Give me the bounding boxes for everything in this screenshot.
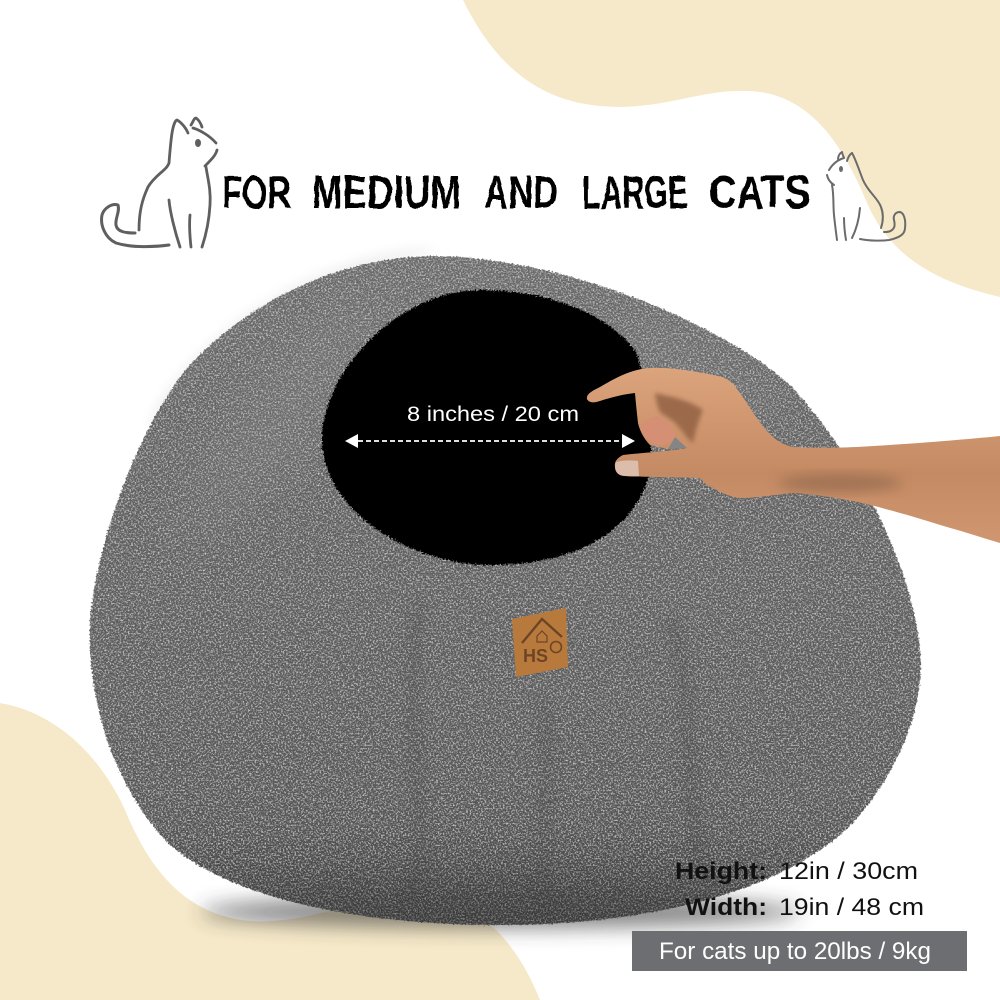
weight limit banner: For cats up to 20lbs / 9kg bbox=[659, 938, 931, 965]
pod shadow bbox=[200, 896, 800, 928]
spec: width: 19in / 48 cm bbox=[779, 894, 924, 921]
white halo behind pod bbox=[150, 248, 440, 440]
brand leather tag bbox=[512, 608, 568, 677]
spec: height bbox=[675, 858, 918, 885]
icon: small cat outline bbox=[827, 152, 905, 241]
product: grey felt cat cave bbox=[88, 252, 990, 944]
cave opening bbox=[322, 290, 651, 565]
title: LARGE bbox=[582, 166, 688, 218]
spec: width bbox=[685, 894, 924, 921]
dimension arrow bbox=[345, 434, 635, 448]
title: MEDIUM bbox=[312, 166, 461, 218]
curled finger pad bbox=[640, 416, 675, 445]
thumb nail bbox=[615, 460, 639, 476]
decorative blob: top right bbox=[463, 0, 1000, 297]
brand leather tag: HS bbox=[523, 646, 548, 666]
spec: height: Height: bbox=[675, 858, 767, 885]
spec: height: 12in / 30cm bbox=[779, 858, 918, 885]
decorative blob: bottom left bbox=[0, 703, 540, 1000]
felt shading bbox=[202, 288, 986, 925]
title: CATS bbox=[709, 166, 810, 218]
gap between fingers bbox=[668, 437, 687, 449]
hand and arm bbox=[587, 368, 1000, 543]
title: FOR bbox=[222, 166, 291, 218]
weight limit banner bbox=[632, 931, 967, 971]
opening width label: 8 inches / 20 cm bbox=[407, 403, 579, 426]
title: AND bbox=[484, 166, 558, 218]
forearm shading bbox=[778, 474, 902, 492]
spec: width: Width: bbox=[685, 894, 767, 921]
icon: large cat outline bbox=[102, 118, 217, 247]
palm interior shadow bbox=[655, 393, 703, 443]
title bbox=[222, 166, 810, 218]
felt body bbox=[90, 256, 921, 925]
